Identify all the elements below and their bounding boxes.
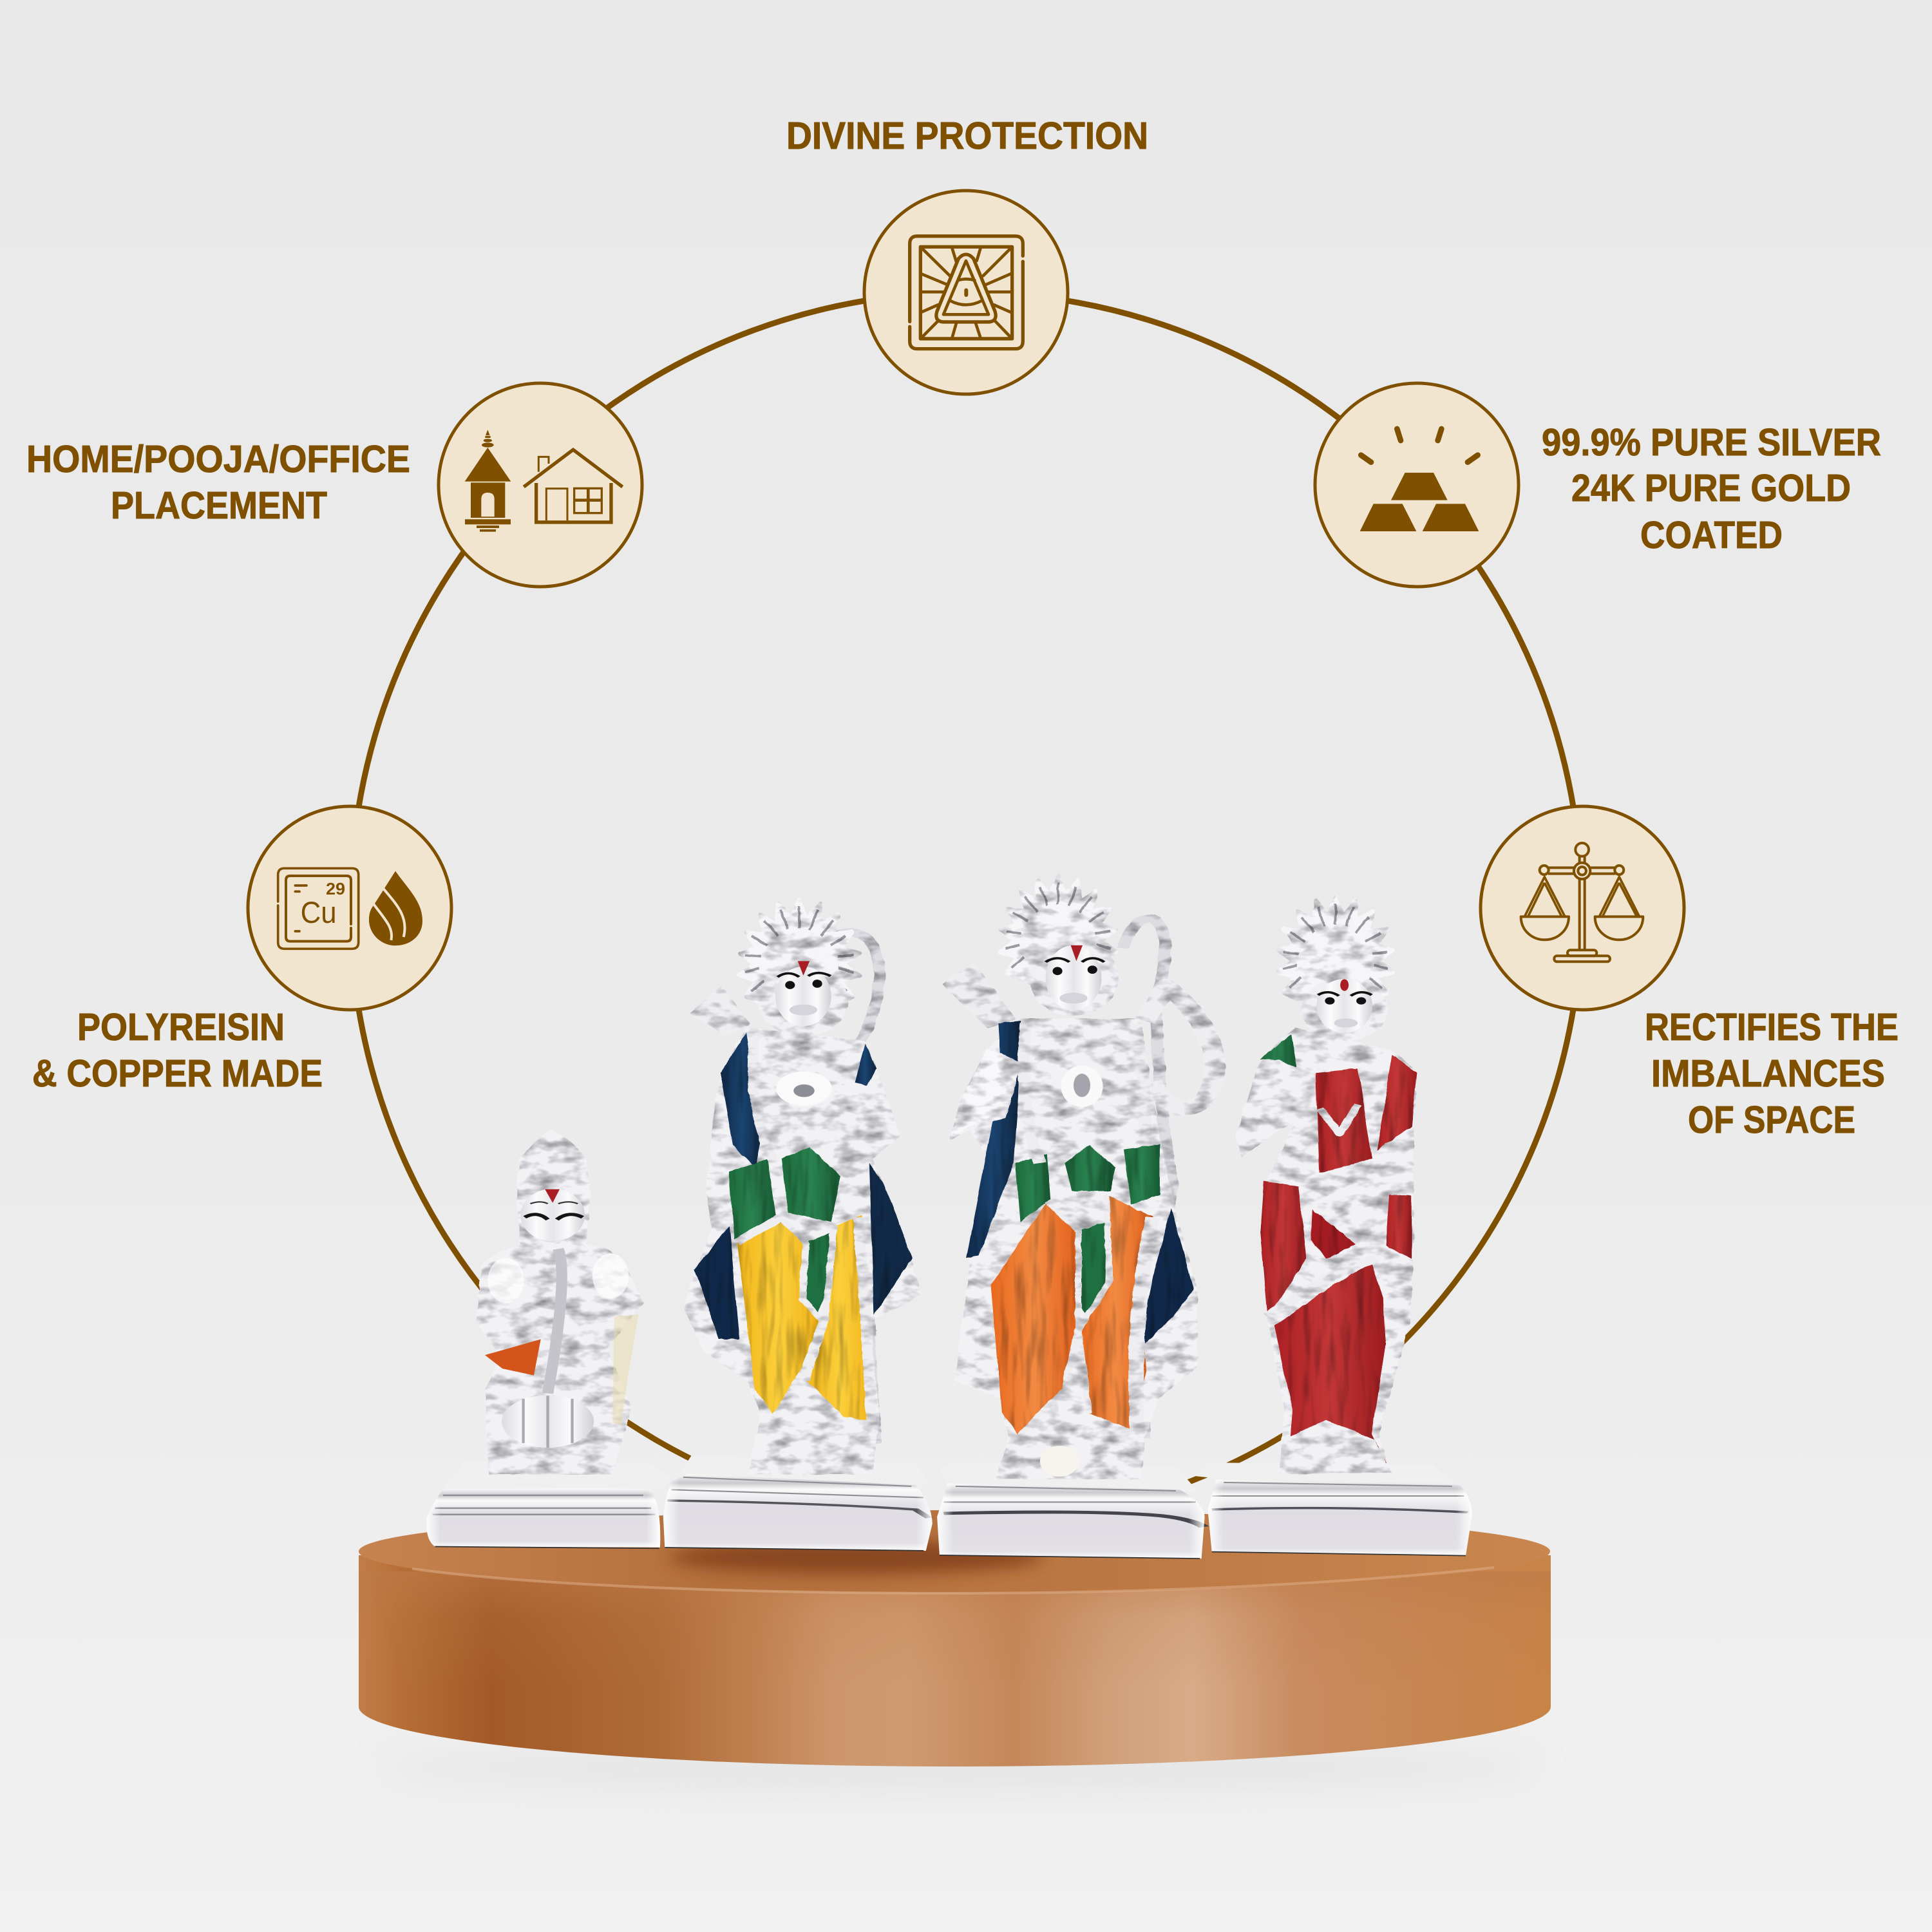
heading: rectifies imbalances — [1645, 1006, 1899, 1141]
heading: polyreisin and copper: POLYREISIN — [77, 1006, 285, 1048]
heading: polyreisin and copper — [32, 1006, 323, 1095]
icon: resin drop — [369, 871, 422, 945]
heading: silver and gold: 99.9% PURE SILVER — [1542, 421, 1881, 464]
statue: lakshman — [684, 900, 922, 1475]
icon: copper element tile: 29 — [326, 879, 345, 898]
copper podium — [359, 1510, 1551, 1766]
badge: placement — [439, 383, 642, 587]
base: rama — [937, 1463, 1205, 1558]
badge: divine protection — [864, 191, 1068, 394]
icon: copper element tile — [278, 868, 359, 949]
heading: home pooja office placement: HOME/POOJA/OFFICE — [26, 438, 410, 480]
icon: gold bars — [1360, 429, 1479, 531]
icon: pyramid eye — [910, 236, 1023, 349]
base: hanuman — [426, 1461, 671, 1548]
badge: silver and gold — [1315, 383, 1519, 587]
icon: scales — [1521, 843, 1643, 961]
soft floor shadow — [380, 1742, 1539, 1794]
bow — [831, 933, 880, 1443]
heading: polyreisin and copper: & COPPER MADE — [32, 1052, 323, 1095]
base: sita — [1196, 1463, 1472, 1556]
bow — [1124, 918, 1173, 1439]
heading: rectifies imbalances: IMBALANCES — [1651, 1052, 1885, 1095]
statue: sita — [1236, 896, 1417, 1474]
icon: temple and house — [465, 430, 623, 532]
heading: silver and gold: COATED — [1640, 514, 1783, 556]
badge: copper material — [248, 806, 451, 1010]
statues — [476, 876, 1417, 1479]
connecting ring — [350, 292, 1582, 1524]
heading: home pooja office placement — [26, 438, 410, 527]
statue: hanuman — [476, 1129, 643, 1475]
badge: balance — [1481, 806, 1684, 1010]
icon: copper element tile: Cu — [301, 896, 337, 930]
statue: rama — [943, 876, 1215, 1479]
heading: rectifies imbalances: RECTIFIES THE — [1645, 1006, 1899, 1048]
heading: silver and gold: 24K PURE GOLD — [1571, 467, 1851, 509]
heading: silver and gold — [1542, 421, 1881, 556]
heading: rectifies imbalances: OF SPACE — [1688, 1099, 1855, 1141]
silver bases — [426, 1456, 1472, 1558]
heading: divine protection: DIVINE PROTECTION — [786, 115, 1148, 157]
heading: home pooja office placement: PLACEMENT — [111, 484, 327, 527]
base: lakshman — [663, 1456, 933, 1551]
